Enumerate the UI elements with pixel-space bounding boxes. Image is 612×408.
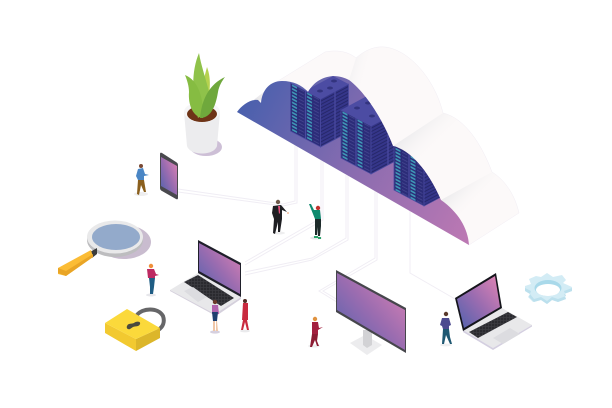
connector lines	[178, 140, 455, 304]
keyhole	[127, 322, 140, 329]
laptop left	[170, 240, 241, 316]
body sides	[105, 323, 136, 351]
handle	[90, 248, 97, 258]
isometric cloud computing illustration	[58, 46, 572, 355]
person: man in suit	[272, 200, 289, 234]
person: woman in purple	[210, 300, 220, 334]
lens shadow	[97, 225, 151, 259]
rack cluster C	[394, 146, 440, 206]
plant	[184, 53, 225, 156]
person: woman in red	[240, 299, 250, 332]
pot shadow	[190, 138, 222, 156]
base	[170, 273, 241, 314]
phone	[160, 153, 178, 199]
stand	[350, 335, 382, 355]
cloud front face	[237, 76, 469, 245]
keyboard	[469, 312, 517, 338]
gear icon	[525, 273, 572, 304]
trackpad	[184, 287, 207, 302]
pot	[184, 112, 220, 154]
leaves	[198, 67, 210, 110]
person: man in purple sweater	[440, 312, 452, 346]
magnifying glass	[58, 220, 151, 276]
screen	[198, 240, 241, 297]
laptop right	[455, 273, 532, 350]
monitor	[336, 270, 406, 355]
person: woman in pink top	[146, 264, 159, 296]
base	[463, 308, 532, 348]
person: walker in blue	[134, 164, 149, 196]
cloud white extrusion	[250, 47, 519, 245]
person: woman in maroon	[308, 317, 323, 348]
padlock	[105, 309, 164, 351]
cloud	[237, 47, 519, 245]
trackpad	[493, 328, 520, 344]
screen	[336, 270, 406, 353]
screen	[455, 273, 502, 331]
lens rim	[87, 223, 143, 257]
rack cluster B	[341, 96, 397, 174]
rack cluster A	[290, 76, 348, 147]
shackle	[137, 310, 164, 330]
person: woman in green	[309, 204, 322, 240]
server racks	[290, 76, 444, 206]
keyboard	[184, 275, 234, 306]
body top	[105, 309, 160, 339]
